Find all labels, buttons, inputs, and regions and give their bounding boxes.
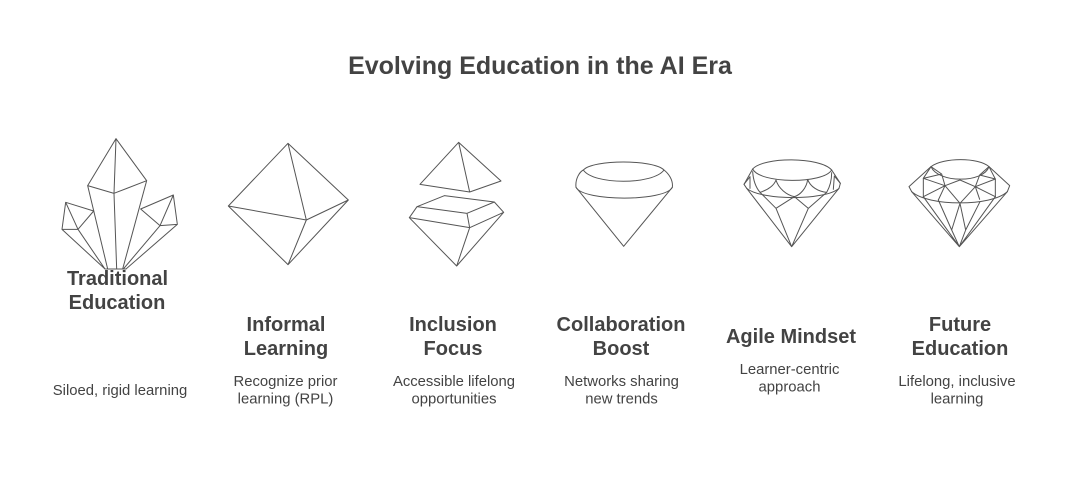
- heading: Collaboration Boost: [557, 314, 685, 360]
- description: Inclusion Focus: [393, 374, 515, 408]
- heading: Future Education: Future: [929, 314, 991, 336]
- heading: Informal Learning: Informal: [247, 314, 325, 336]
- description: Future Education: learning: [931, 392, 983, 408]
- heading: Collaboration Boost: Collaboration: [557, 314, 685, 336]
- heading: Collaboration Boost: Boost: [593, 338, 650, 360]
- description: Inclusion Focus: opportunities: [412, 392, 496, 408]
- heading: Traditional Education: Education: [69, 292, 165, 314]
- heading: Inclusion Focus: Focus: [424, 338, 482, 360]
- description: Collaboration Boost: Networks sharing: [564, 374, 679, 390]
- description: Future Education: Lifelong, inclusive: [898, 374, 1016, 390]
- description: Future Education: [898, 374, 1016, 408]
- description: Inclusion Focus: Accessible lifelong: [393, 374, 515, 390]
- description: Collaboration Boost: [564, 374, 679, 408]
- icon: crystal cluster: [62, 139, 177, 269]
- heading: Future Education: Education: [912, 338, 1008, 360]
- icon: split gem: [409, 142, 504, 266]
- icon: faceted diamond: [744, 160, 840, 247]
- icon: brilliant diamond: [909, 160, 1010, 247]
- heading: Agile Mindset: Agile Mindset: [726, 326, 856, 348]
- description: Informal Learning: [234, 374, 338, 408]
- heading: Informal Learning: Learning: [244, 338, 328, 360]
- heading: Inclusion Focus: Inclusion: [409, 314, 497, 336]
- description: Agile Mindset: approach: [759, 380, 820, 396]
- heading: Traditional Education: Traditional: [67, 268, 168, 290]
- icon: octahedron: [228, 143, 348, 265]
- heading: Informal Learning: [244, 314, 328, 360]
- icon: simple diamond: [576, 162, 672, 246]
- title: Evolving Education in the AI Era: [348, 52, 733, 80]
- description: Agile Mindset: [740, 362, 840, 396]
- heading: Traditional Education: [67, 268, 168, 314]
- description: Agile Mindset: Learner-centric: [740, 362, 840, 378]
- heading: Future Education: [912, 314, 1008, 360]
- description: Traditional Education: Siloed, rigid learning: [53, 383, 187, 399]
- description: Informal Learning: learning (RPL): [238, 392, 333, 408]
- description: Collaboration Boost: new trends: [585, 392, 658, 408]
- description: Informal Learning: Recognize prior: [234, 374, 338, 390]
- heading: Inclusion Focus: [409, 314, 497, 360]
